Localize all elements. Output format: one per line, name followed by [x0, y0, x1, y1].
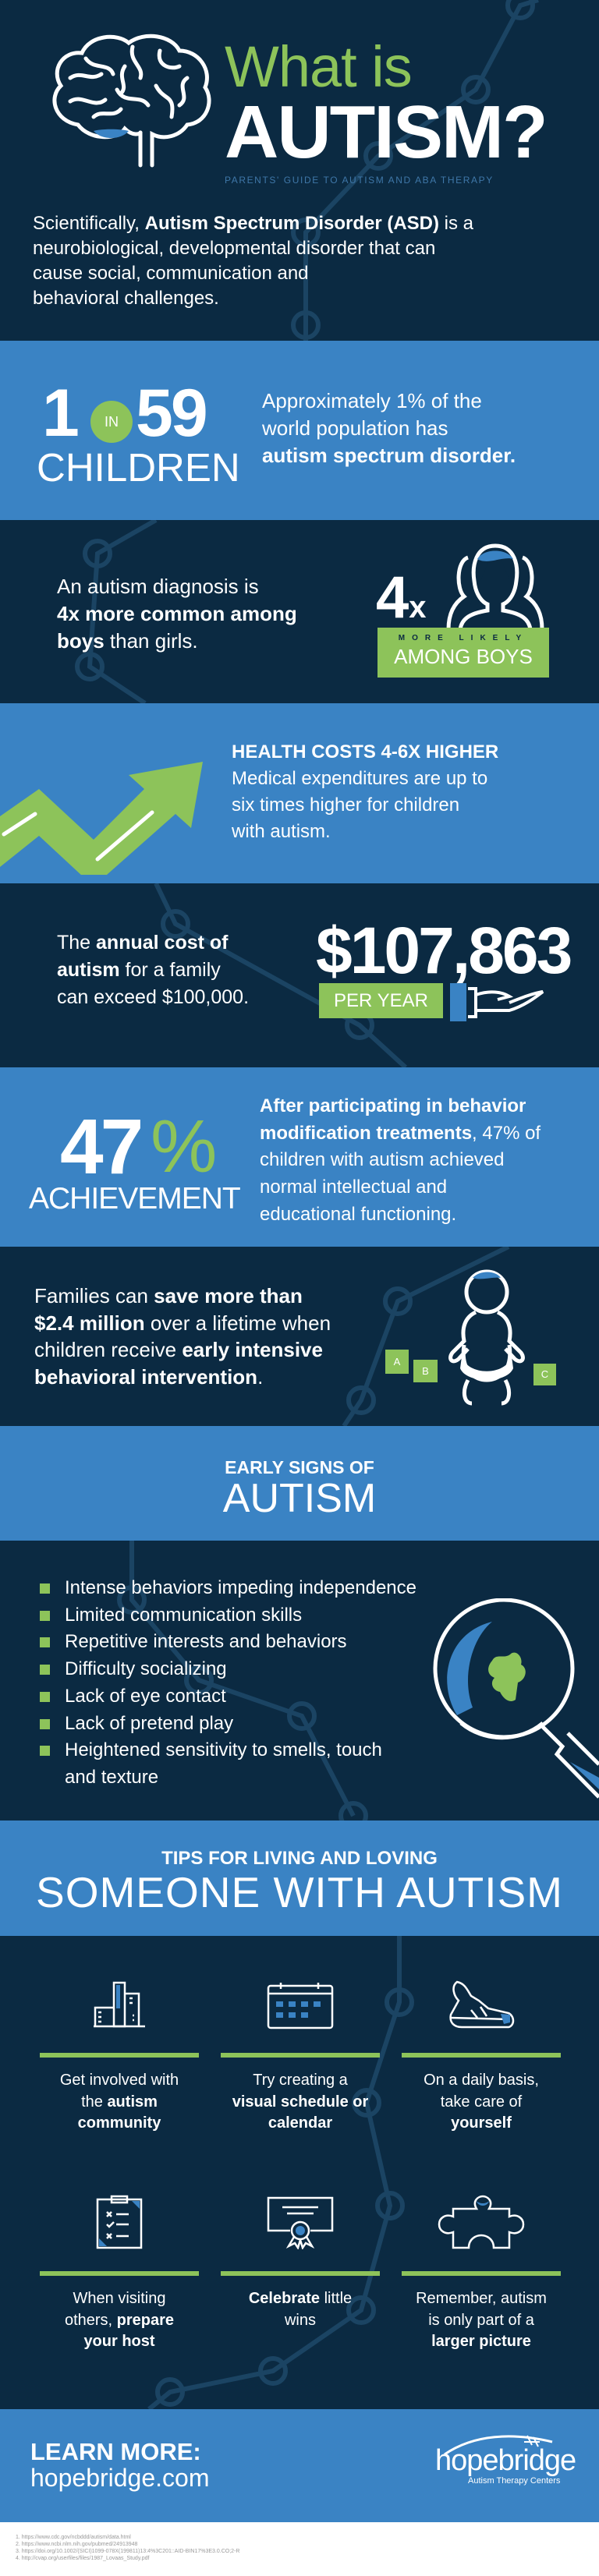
icon: magnifier with puzzle piece: [434, 1598, 599, 1799]
logo: hopebridge: [435, 2435, 576, 2486]
tip: community: community: [78, 2114, 161, 2132]
icon: baby with blocks: B: [422, 1365, 429, 1377]
list: early signs: Lack of eye contact: [65, 1686, 226, 1707]
tip: prepare your host: [40, 2196, 199, 2350]
band: early signs heading: EARLY SIGNS OF: [225, 1457, 374, 1477]
band: early signs heading: AUTISM: [223, 1476, 376, 1521]
text: [260, 1095, 541, 1225]
tip: take care of yourself: take care of: [441, 2093, 522, 2110]
tips grid: [40, 1980, 561, 2350]
icon: baby with blocks: C: [541, 1368, 548, 1380]
tip: visual schedule: Try creating a: [253, 2072, 348, 2089]
references: 4. http://cvap.org/userfiles/files/1987_Lovaas_Study.pdf: [16, 2556, 149, 2561]
stat: 1 in 59 children: IN: [105, 414, 119, 430]
text: educational functioning.: [260, 1204, 456, 1225]
header: brain icon: [52, 34, 211, 167]
band: 47%: [0, 1067, 599, 1247]
section: 4x boys: An autism diagnosis is: [57, 575, 259, 598]
section: annual cost: can exceed $100,000.: [57, 986, 249, 1008]
band: learn more: [0, 2409, 599, 2522]
section: annual cost: autism for a family: [57, 959, 221, 981]
tip: take care of yourself: [402, 1980, 561, 2132]
tip: community: [40, 1982, 199, 2132]
icon: 4x more likely among boys: [376, 544, 549, 678]
learn more text: LEARN MORE:: [30, 2438, 201, 2465]
tip: celebrate wins: wins: [285, 2311, 316, 2328]
text: world population has: [262, 416, 448, 440]
list: early signs: [40, 1577, 416, 1788]
tip: visual schedule: visual schedule or: [232, 2093, 368, 2110]
list: early signs: Difficulty socializing: [65, 1658, 227, 1679]
references: [0, 2522, 599, 2576]
section: 4x boys: [57, 575, 297, 653]
text: [232, 741, 498, 842]
list: early signs: and texture: [65, 1767, 158, 1788]
title: AUTISM?: [225, 90, 547, 174]
intro paragraph: [33, 213, 473, 309]
text: normal intellectual and: [260, 1177, 447, 1198]
icon: rising arrow: [0, 762, 203, 875]
band: tips heading: [0, 1821, 599, 1936]
stat: 47% achievement: %: [151, 1105, 217, 1188]
list: early signs: Repetitive interests and behaviors: [65, 1631, 347, 1652]
section: families save: $2.4 million over a lifetime when: [34, 1311, 331, 1335]
stat: 47% achievement: 47: [60, 1103, 140, 1191]
stat: 1 in 59 children: 59: [136, 376, 206, 451]
intro paragraph: behavioral challenges.: [33, 288, 219, 309]
text: [262, 389, 516, 467]
references: 3. https://doi.org/10.1002/(SICI)1099-078X(199811)13:4%3C201::AID-BIN17%3E3.0.CO;2-R: [16, 2549, 239, 2554]
intro paragraph: Scientifically, Autism Spectrum Disorder (ASD) is a: [33, 213, 473, 234]
tip: community: the autism: [81, 2093, 158, 2110]
section: families save: behavioral intervention.: [34, 1365, 263, 1389]
tip: prepare your host: others, prepare: [65, 2311, 174, 2328]
icon: baby with blocks: A: [394, 1356, 400, 1368]
tip: visual schedule: calendar: [268, 2114, 332, 2132]
text: six times higher for children: [232, 794, 459, 816]
logo: hopebridge: Autism Therapy Centers: [468, 2476, 560, 2486]
list: early signs: Heightened sensitivity to smells, touch: [65, 1739, 382, 1760]
title: PARENTS' GUIDE TO AUTISM AND ABA THERAPY: [225, 175, 494, 186]
text: with autism.: [232, 821, 331, 842]
text: autism spectrum disorder.: [262, 444, 516, 467]
icon: 4x more likely among boys: AMONG BOYS: [394, 645, 533, 668]
tip: celebrate wins: Celebrate little: [249, 2290, 352, 2307]
band: tips heading: SOMEONE WITH AUTISM: [36, 1868, 563, 1916]
text: HEALTH COSTS 4-6X HIGHER: [232, 741, 498, 763]
tip: prepare your host: When visiting: [73, 2290, 165, 2307]
text: Approximately 1% of the: [262, 389, 482, 412]
references: 2. https://www.ncbi.nlm.nih.gov/pubmed/24913948: [16, 2542, 137, 2547]
tip: larger picture: larger picture: [431, 2333, 531, 2350]
stat: $107,863 per year: [316, 914, 571, 1021]
stat: 1 in 59 children: 1: [42, 376, 80, 451]
title: [225, 34, 547, 186]
icon: baby with blocks: [385, 1269, 556, 1405]
band: early signs heading: [0, 1426, 599, 1541]
list: early signs: Limited communication skills: [65, 1605, 302, 1626]
tip: take care of yourself: yourself: [451, 2114, 512, 2132]
tip: prepare your host: your host: [83, 2333, 155, 2350]
band: 1 in 59: [0, 341, 599, 520]
section: families save: [34, 1284, 331, 1389]
stat: $107,863 per year: $107,863: [316, 914, 570, 987]
tip: take care of yourself: On a daily basis,: [424, 2072, 539, 2089]
text: Medical expenditures are up to: [232, 768, 487, 789]
tip: larger picture: [402, 2196, 561, 2350]
icon: 4x more likely among boys: 4x: [376, 564, 427, 631]
band: learn more: hopebridge.com: [30, 2464, 209, 2492]
stat: 1 in 59 children: CHILDREN: [37, 445, 240, 490]
intro paragraph: neurobiological, developmental disorder that can: [33, 238, 435, 259]
icon: 4x more likely among boys: MORE LIKELY: [399, 634, 528, 642]
text: children with autism achieved: [260, 1149, 504, 1170]
band: tips heading: TIPS FOR LIVING AND LOVING: [161, 1848, 438, 1869]
band: health costs: [0, 703, 599, 883]
references: 1. https://www.cdc.gov/ncbddd/autism/data.html: [16, 2535, 131, 2540]
section: annual cost: The annual cost of: [57, 932, 228, 954]
logo: hopebridge: hopebridge: [435, 2444, 576, 2477]
list: early signs: Intense behaviors impeding independence: [65, 1577, 416, 1598]
text: After participating in behavior: [260, 1095, 526, 1116]
stat: $107,863 per year: PER YEAR: [334, 990, 428, 1011]
intro paragraph: cause social, communication and: [33, 263, 309, 284]
tip: community: Get involved with: [60, 2072, 179, 2089]
section: annual cost: [57, 932, 249, 1008]
section: 4x boys: 4x more common among: [57, 602, 297, 625]
stat: 47% achievement: ACHIEVEMENT: [29, 1182, 240, 1215]
stat: 1 in 59 children: [37, 376, 240, 490]
section: families save: Families can save more than: [34, 1284, 303, 1307]
tip: visual schedule: [221, 1983, 380, 2132]
text: modification treatments, 47% of: [260, 1123, 541, 1144]
title: What is: [225, 34, 412, 99]
tip: larger picture: is only part of a: [428, 2311, 534, 2328]
tip: celebrate wins: [221, 2197, 380, 2328]
section: 4x boys: boys than girls.: [57, 629, 198, 653]
section: families save: children receive early intensive: [34, 1338, 323, 1361]
tip: larger picture: Remember, autism: [416, 2290, 547, 2307]
stat: 47% achievement: [29, 1103, 240, 1215]
list: early signs: Lack of pretend play: [65, 1713, 233, 1734]
